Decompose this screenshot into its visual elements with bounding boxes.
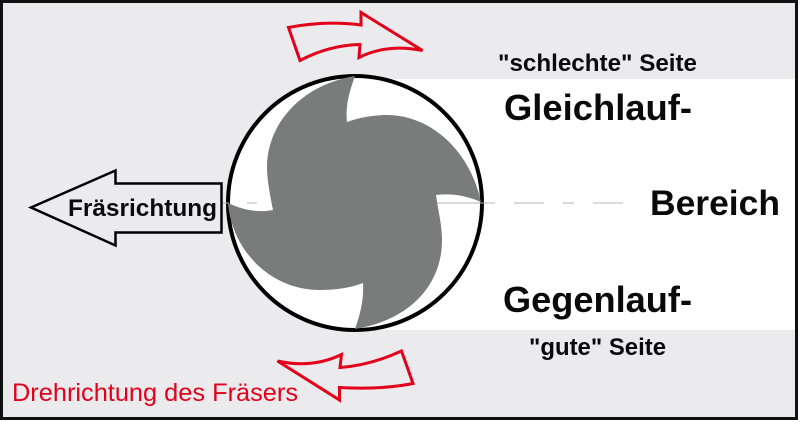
arrow label: Fräsrichtung <box>68 195 217 222</box>
arrow: red rotation arrow bottom <box>278 351 413 400</box>
label: bad side: "schlechte" Seite <box>498 50 697 77</box>
cutter outline circle <box>228 76 482 330</box>
label: good side: "gute" Seite <box>529 334 666 361</box>
arrow outline <box>31 170 222 246</box>
cutter centre line <box>220 202 623 204</box>
cutter body with four teeth <box>228 76 481 329</box>
heading: conventional milling: Gegenlauf- <box>503 279 692 320</box>
arrow: feed direction <box>31 170 222 246</box>
arrow: red rotation arrow top <box>288 12 422 60</box>
heading: climb milling: Gleichlauf- <box>504 87 692 128</box>
icon: milling cutter <box>220 76 623 330</box>
heading: zone: Bereich <box>650 183 780 223</box>
label: cutter rotation direction: Drehrichtung des Fräsers <box>12 379 298 407</box>
panel: white cutting zone band <box>355 79 795 330</box>
